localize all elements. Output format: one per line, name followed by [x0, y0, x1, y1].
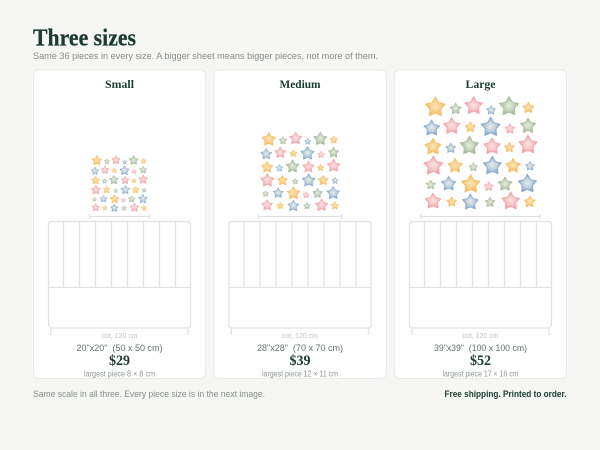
- dimensions: large: 39"x39" (100 x 100 cm): [434, 343, 527, 353]
- dimensions: medium: 28"x28" (70 x 70 cm): [257, 343, 343, 353]
- width rule: small: [90, 214, 150, 219]
- cot label: large: cot, 120 cm: [462, 331, 498, 340]
- panel: large: [394, 70, 566, 378]
- heading: small: Small: [105, 77, 135, 91]
- subtitle: Same 36 pieces in every size. A bigger sheet means bigger pieces, not more of them.: [33, 51, 378, 62]
- footnote: Same scale in all three. Every piece size is in the next image.: [33, 389, 265, 400]
- title: Three sizes: [33, 26, 136, 52]
- price: large: $52: [470, 353, 491, 369]
- cot: medium: [229, 222, 371, 335]
- panel: small: [34, 70, 206, 378]
- heading: large: Large: [466, 77, 496, 91]
- panel: medium: [214, 70, 386, 378]
- price: small: $29: [109, 353, 130, 369]
- largest piece: small: largest piece 8 × 8 cm: [84, 370, 155, 378]
- cot label: small: cot, 120 cm: [102, 331, 138, 340]
- star sheet: medium: [261, 132, 340, 211]
- cot: large: [410, 222, 552, 335]
- heading: medium: Medium: [280, 77, 320, 91]
- width rule: large: [421, 214, 540, 219]
- star sheet: small: [91, 155, 148, 212]
- price: medium: $39: [290, 353, 310, 369]
- cot: small: [48, 222, 190, 335]
- shipping note: Free shipping. Printed to order.: [444, 389, 566, 400]
- largest piece: large: largest piece 17 × 16 cm: [442, 370, 518, 378]
- largest piece: medium: largest piece 12 × 11 cm: [262, 370, 338, 378]
- dimensions: small: 20"x20" (50 x 50 cm): [76, 343, 163, 353]
- width rule: medium: [258, 214, 342, 219]
- cot label: medium: cot, 120 cm: [282, 331, 318, 340]
- star sheet: large: [424, 97, 537, 209]
